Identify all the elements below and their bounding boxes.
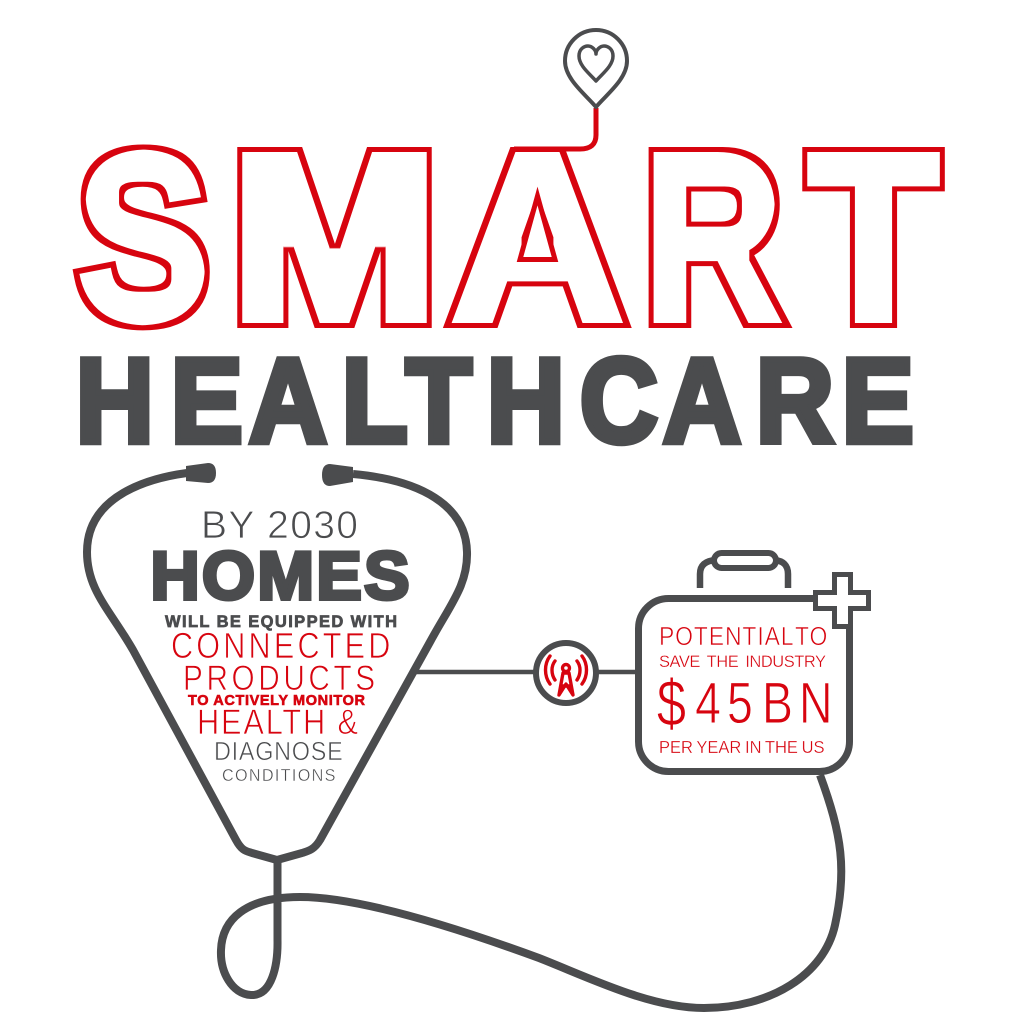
text block: savings statistic: 45BN [695,671,833,736]
case handle [700,560,788,588]
text block: savings statistic: POTENTIAL TO [659,623,827,651]
title: SMART outlined letters: S [76,105,210,370]
text block: stethoscope statistic: HOMES [150,538,410,614]
case body [638,598,850,772]
icon: medical plus [816,574,868,626]
text block: savings statistic: SAVE THE INDUSTRY [659,653,826,671]
text block: stethoscope statistic: HEALTH & [197,702,358,741]
text block: stethoscope statistic: DIAGNOSE [214,738,343,766]
text block: savings statistic: $ [657,666,686,740]
text block: stethoscope statistic: WILL BE EQUIPPED WITH [165,613,397,631]
title: SMART outlined letters: A [450,105,625,370]
letter A inner counter [520,196,555,260]
stethoscope tubing and earpieces [87,463,841,1008]
text block: stethoscope statistic: TO ACTIVELY MONITOR [188,693,366,709]
title: SMART outlined letters: M [230,105,439,370]
medical case [638,553,868,772]
connector line from signal icon to medical case [597,670,638,674]
heading: HEALTHCARE: HEALTHCARE [76,335,914,468]
case handle grip [714,553,776,568]
title: SMART outlined letters: T [808,105,939,370]
icon: heart location pin with red connector [514,30,627,149]
title: SMART outlined letters: R [643,105,783,370]
text block: stethoscope statistic: PRODUCTS [183,659,375,698]
text block: stethoscope statistic [150,504,410,785]
text block: stethoscope statistic: CONNECTED [171,627,390,667]
connector line from stethoscope to signal icon [416,670,535,674]
title: SMART outlined letters [76,105,939,370]
icon: signal tower in circle [536,643,596,703]
text block: stethoscope statistic: CONDITIONS [222,765,335,785]
text block: stethoscope statistic: BY 2030 [201,504,358,547]
text block: savings statistic [657,623,833,757]
text block: savings statistic: PER YEAR IN THE US [659,736,825,757]
